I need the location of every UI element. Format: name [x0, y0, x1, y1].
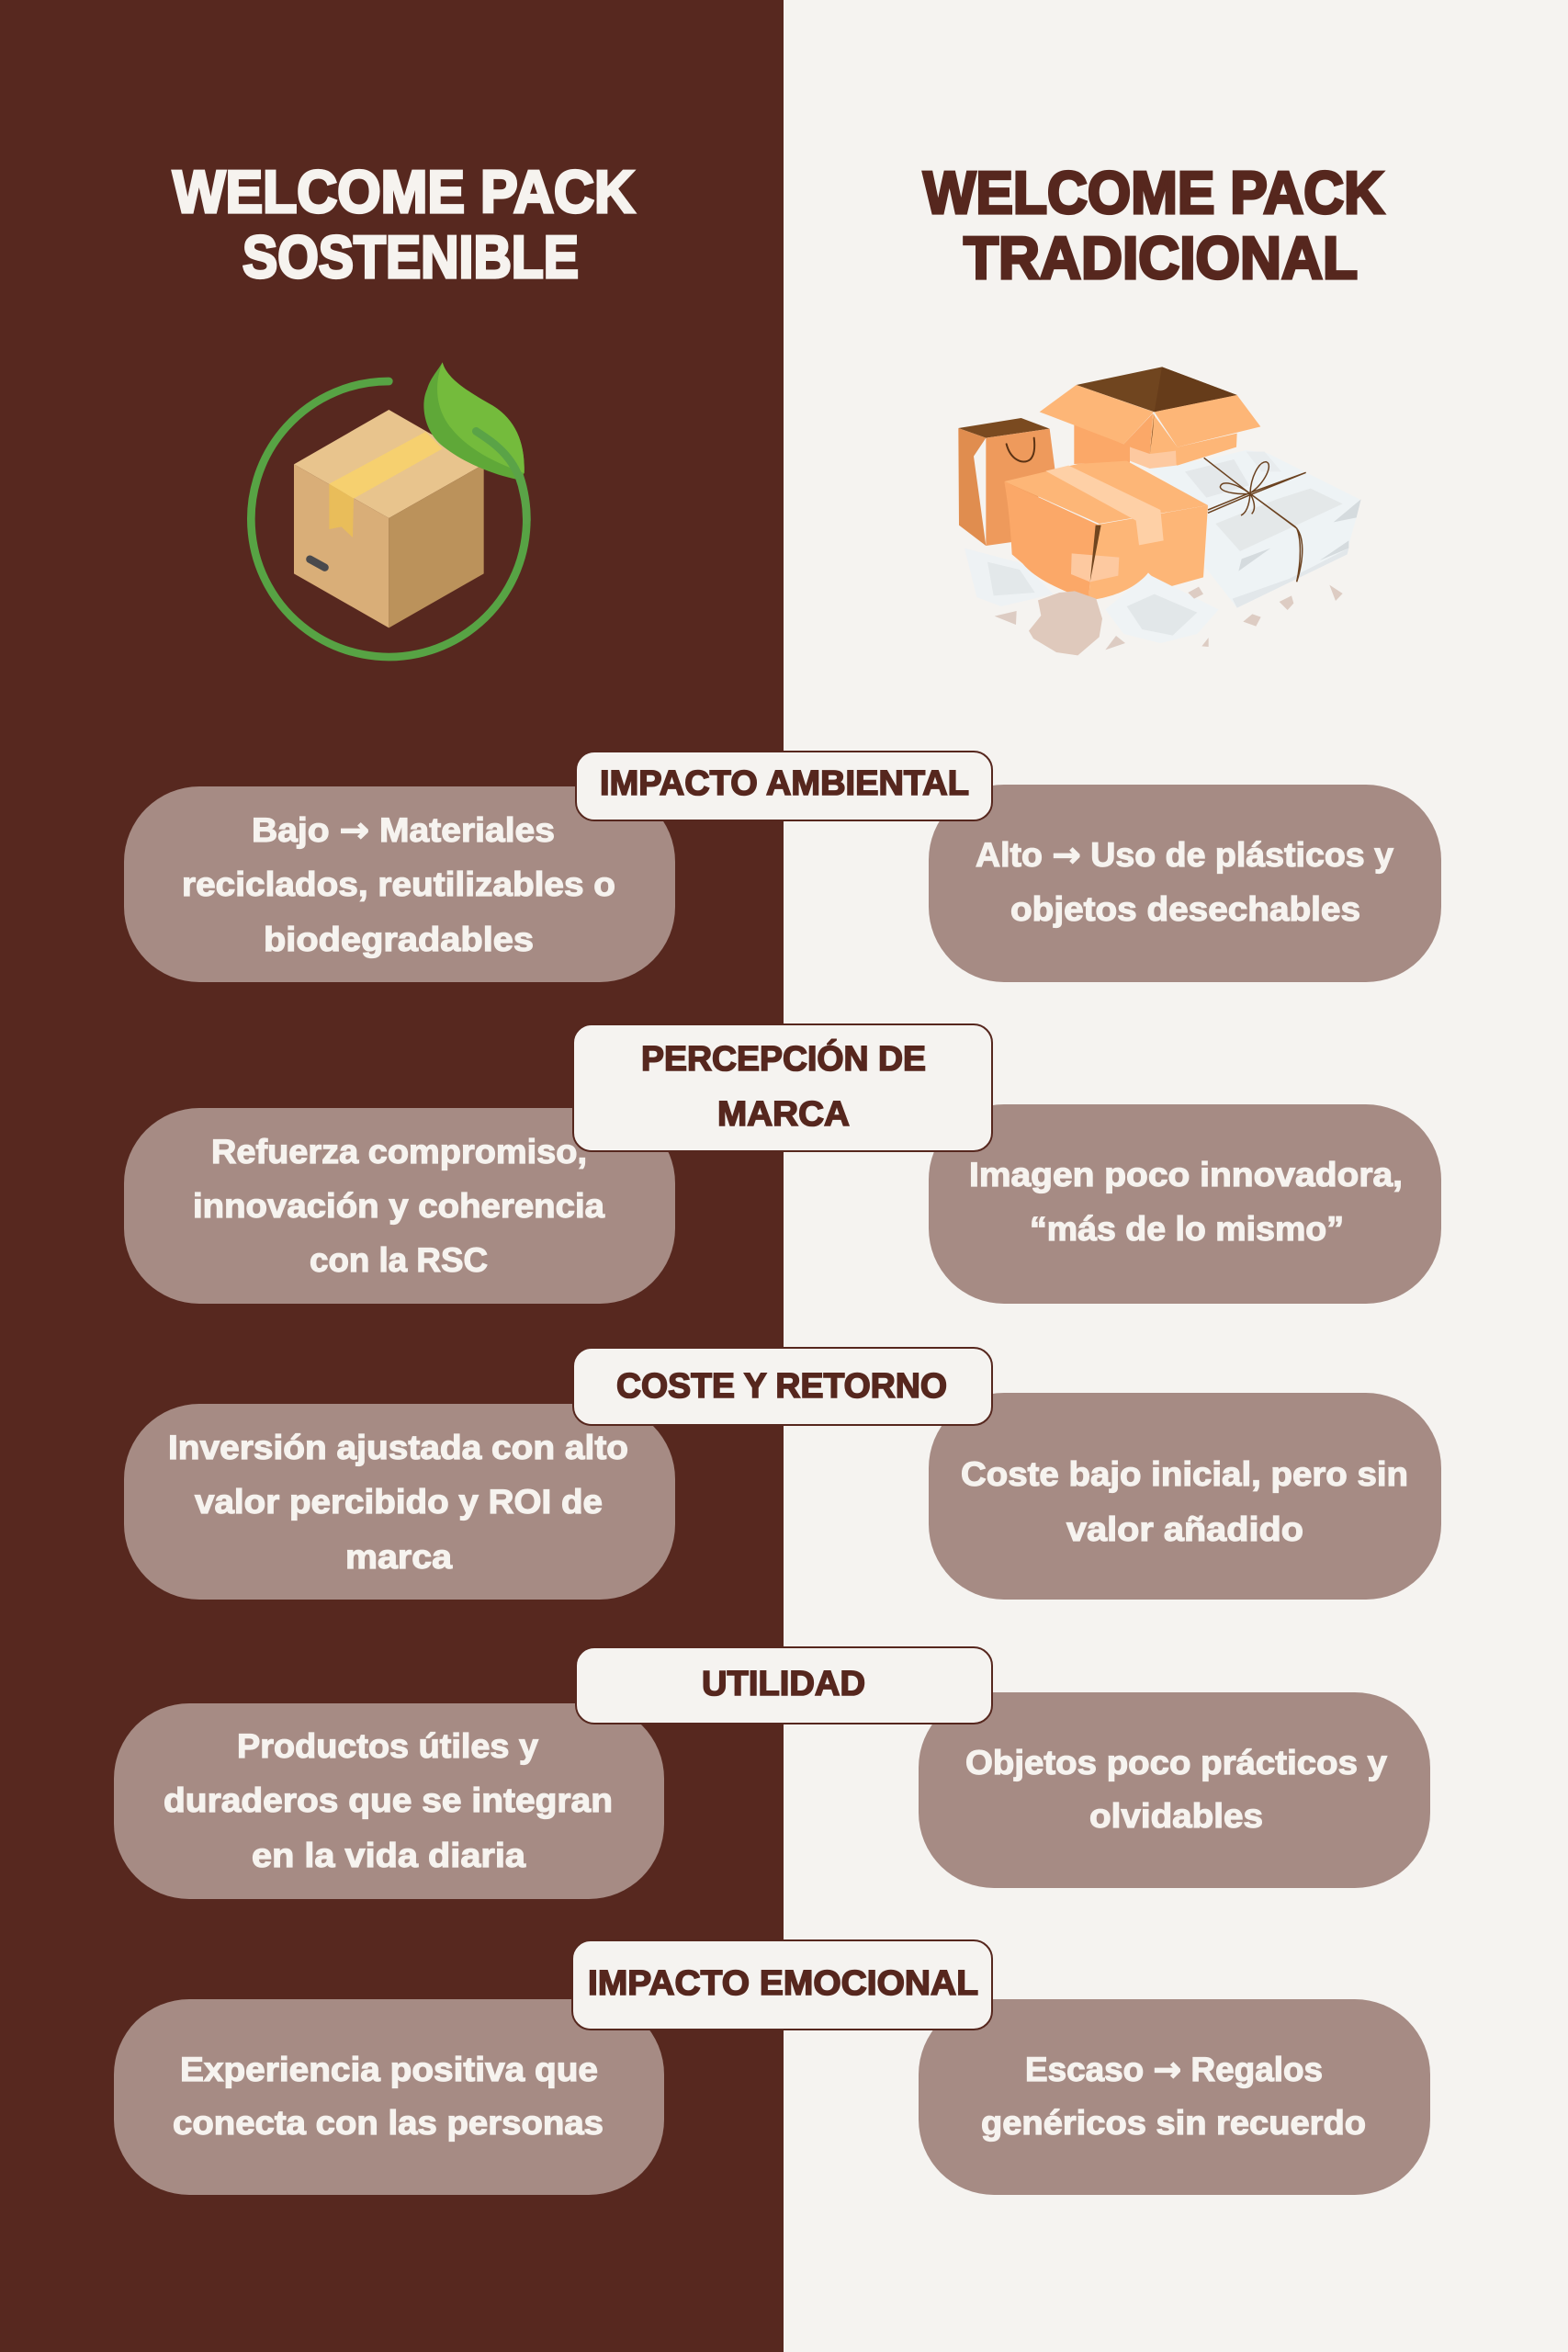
pill: sostenible coste — [124, 1404, 675, 1600]
row: impacto emocional — [114, 1940, 1430, 2195]
pill: sostenible percepcion: innovación y coherencia — [193, 1187, 604, 1225]
row: coste y retorno — [124, 1348, 1441, 1600]
pill: sostenible utilidad: en la vida diaria — [252, 1837, 525, 1874]
pill: tradicional emocional: Escaso → Regalos — [1025, 2050, 1323, 2089]
title: welcome pack sostenible — [173, 158, 635, 290]
title: welcome pack sostenible: WELCOME PACK — [173, 158, 635, 225]
pill: tradicional impacto ambiental — [929, 785, 1441, 982]
panel: left background — [0, 0, 784, 2352]
pill: tradicional utilidad — [919, 1692, 1430, 1888]
label: percepcion de marca: MARCA — [717, 1095, 850, 1134]
pill: sostenible impacto ambiental: Bajo → Materiales — [252, 810, 555, 850]
pill: tradicional emocional: genéricos sin recuerdo — [981, 2104, 1366, 2142]
pill: tradicional coste — [929, 1393, 1441, 1600]
pill: sostenible utilidad: Productos útiles y — [237, 1727, 538, 1765]
label: percepcion de marca — [573, 1024, 992, 1151]
label: utilidad: UTILIDAD — [702, 1665, 865, 1703]
title: welcome pack tradicional: WELCOME PACK — [923, 159, 1384, 226]
pill: tradicional emocional — [919, 1999, 1430, 2195]
pill: sostenible coste: valor percibido y ROI de — [195, 1483, 603, 1521]
pill: sostenible percepcion: Refuerza compromiso, — [211, 1133, 587, 1170]
title: welcome pack tradicional: TRADICIONAL — [964, 224, 1358, 291]
label: coste y retorno — [573, 1348, 992, 1425]
pill: sostenible impacto ambiental: biodegradables — [264, 921, 534, 958]
pill: sostenible emocional: conecta con las personas — [173, 2104, 604, 2142]
label: coste y retorno: COSTE Y RETORNO — [616, 1367, 947, 1406]
pill: tradicional percepcion: “más de lo mismo” — [1030, 1210, 1344, 1248]
label: percepcion de marca: PERCEPCIÓN DE — [641, 1038, 926, 1079]
pill: tradicional percepcion — [929, 1104, 1441, 1304]
pill: sostenible coste: marca — [345, 1538, 452, 1576]
row: percepcion de marca — [124, 1024, 1441, 1304]
title: welcome pack tradicional — [923, 159, 1384, 291]
pill: sostenible impacto ambiental — [124, 786, 675, 982]
pill: tradicional coste: Coste bajo inicial, pero sin — [961, 1455, 1408, 1493]
label: impacto emocional — [572, 1940, 992, 2030]
pill: sostenible coste: Inversión ajustada con alto — [168, 1429, 628, 1466]
pill: tradicional impacto ambiental: Alto → Uso de plásticos y — [976, 835, 1393, 875]
row: utilidad — [114, 1647, 1430, 1899]
pill: tradicional utilidad: olvidables — [1089, 1797, 1263, 1835]
pill: sostenible impacto ambiental: reciclados, reutilizables o — [182, 865, 615, 903]
pill: tradicional utilidad: Objetos poco prácticos y — [965, 1744, 1387, 1781]
panel: right background — [784, 0, 1568, 2352]
label: impacto emocional: IMPACTO EMOCIONAL — [588, 1964, 978, 2003]
pill: sostenible percepcion: con la RSC — [310, 1241, 488, 1279]
pill: sostenible emocional — [114, 1999, 664, 2195]
row: impacto ambiental — [124, 752, 1441, 982]
pill: sostenible utilidad: duraderos que se integran — [164, 1781, 613, 1819]
label: utilidad — [576, 1647, 992, 1724]
pill: sostenible percepcion — [124, 1108, 675, 1304]
pill: sostenible emocional: Experiencia positiva que — [180, 2051, 598, 2088]
icon: cardboard box with leaf and green ring — [251, 362, 526, 657]
label: impacto ambiental — [576, 752, 992, 820]
pill: sostenible utilidad — [114, 1703, 664, 1899]
title: welcome pack sostenible: SOSTENIBLE — [243, 223, 579, 290]
pill: tradicional percepcion: Imagen poco innovadora, — [969, 1156, 1403, 1193]
icon: traditional boxes, bag and paper pile — [958, 367, 1361, 655]
pill: tradicional impacto ambiental: objetos desechables — [1010, 890, 1360, 928]
label: impacto ambiental: IMPACTO AMBIENTAL — [600, 764, 969, 803]
pill: tradicional coste: valor añadido — [1066, 1510, 1303, 1548]
